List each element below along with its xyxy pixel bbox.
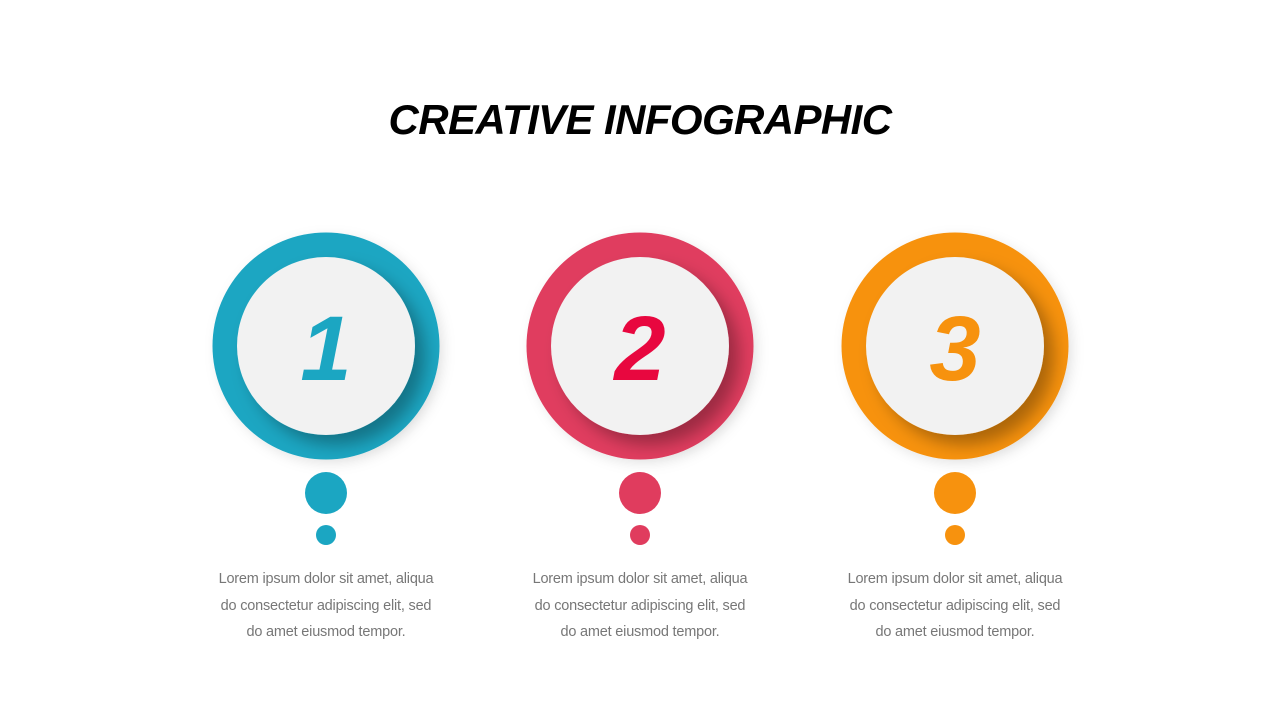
step 2 circle: 2 (612, 298, 666, 400)
text block 2 (533, 571, 748, 640)
text block 1: do amet eiusmod tempor. (246, 624, 406, 640)
step 3 circle: 3 (929, 298, 981, 400)
text block 3: do amet eiusmod tempor. (875, 624, 1034, 640)
text block 2: do amet eiusmod tempor. (560, 624, 720, 640)
text block 1: do consectetur adipiscing elit, sed (221, 598, 431, 614)
text block 1 (219, 571, 434, 640)
text block 2: Lorem ipsum dolor sit amet, aliqua (533, 571, 747, 587)
text block 3: Lorem ipsum dolor sit amet, aliqua (848, 571, 1062, 587)
step 1 circle: 1 (300, 298, 352, 400)
step 3 circle (842, 232, 1068, 545)
text block 1: Lorem ipsum dolor sit amet, aliqua (219, 571, 433, 587)
title: CREATIVE INFOGRAPHIC (389, 96, 891, 143)
text block 2: do consectetur adipiscing elit, sed (535, 598, 745, 614)
text block 3: do consectetur adipiscing elit, sed (850, 598, 1060, 614)
step 1 circle (212, 232, 440, 545)
text block 3 (848, 571, 1063, 640)
step 2 circle (526, 232, 754, 545)
